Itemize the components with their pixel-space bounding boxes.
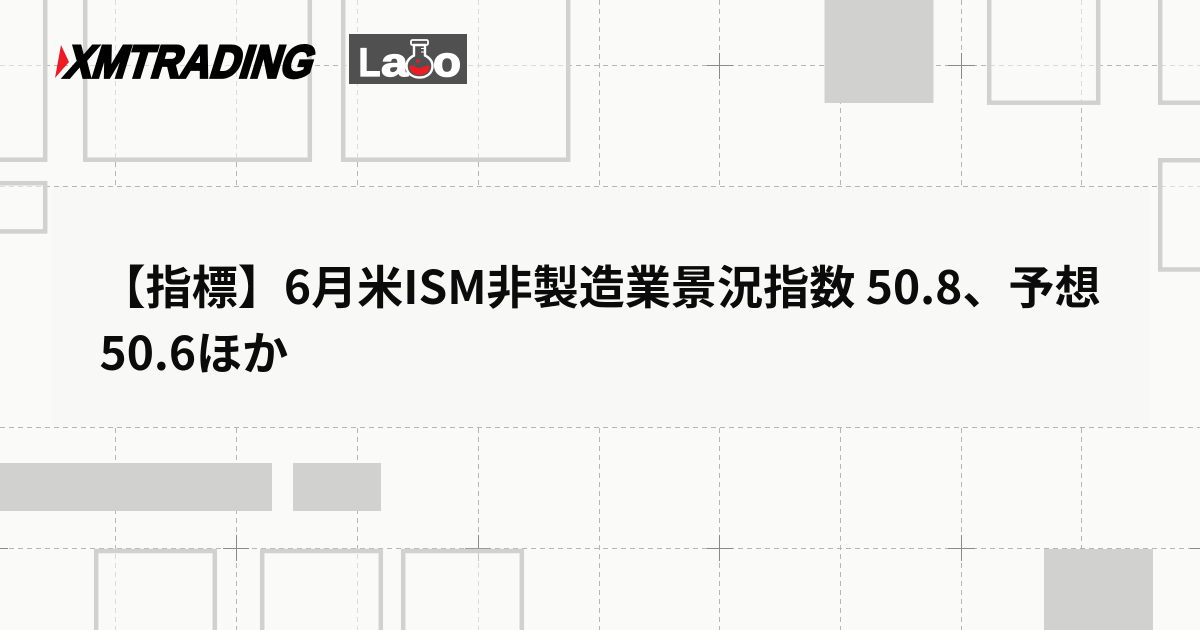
logo wordmark: XMTRADING [60,35,323,87]
badge letters La: a [381,41,409,85]
icon: flask [406,40,432,78]
badge letter o: o [433,38,461,85]
badge letters La: L [358,41,380,85]
title panel backdrop [52,187,1150,427]
badge letters La [358,41,409,85]
logo: XMTRADING [55,35,323,87]
logo: Lab badge [349,34,467,85]
logo arrow [55,45,69,78]
title: 【指標】6月米ISM非製造業景況指数 50.8、予想 50.6ほか [100,252,1101,384]
badge background [349,34,467,84]
